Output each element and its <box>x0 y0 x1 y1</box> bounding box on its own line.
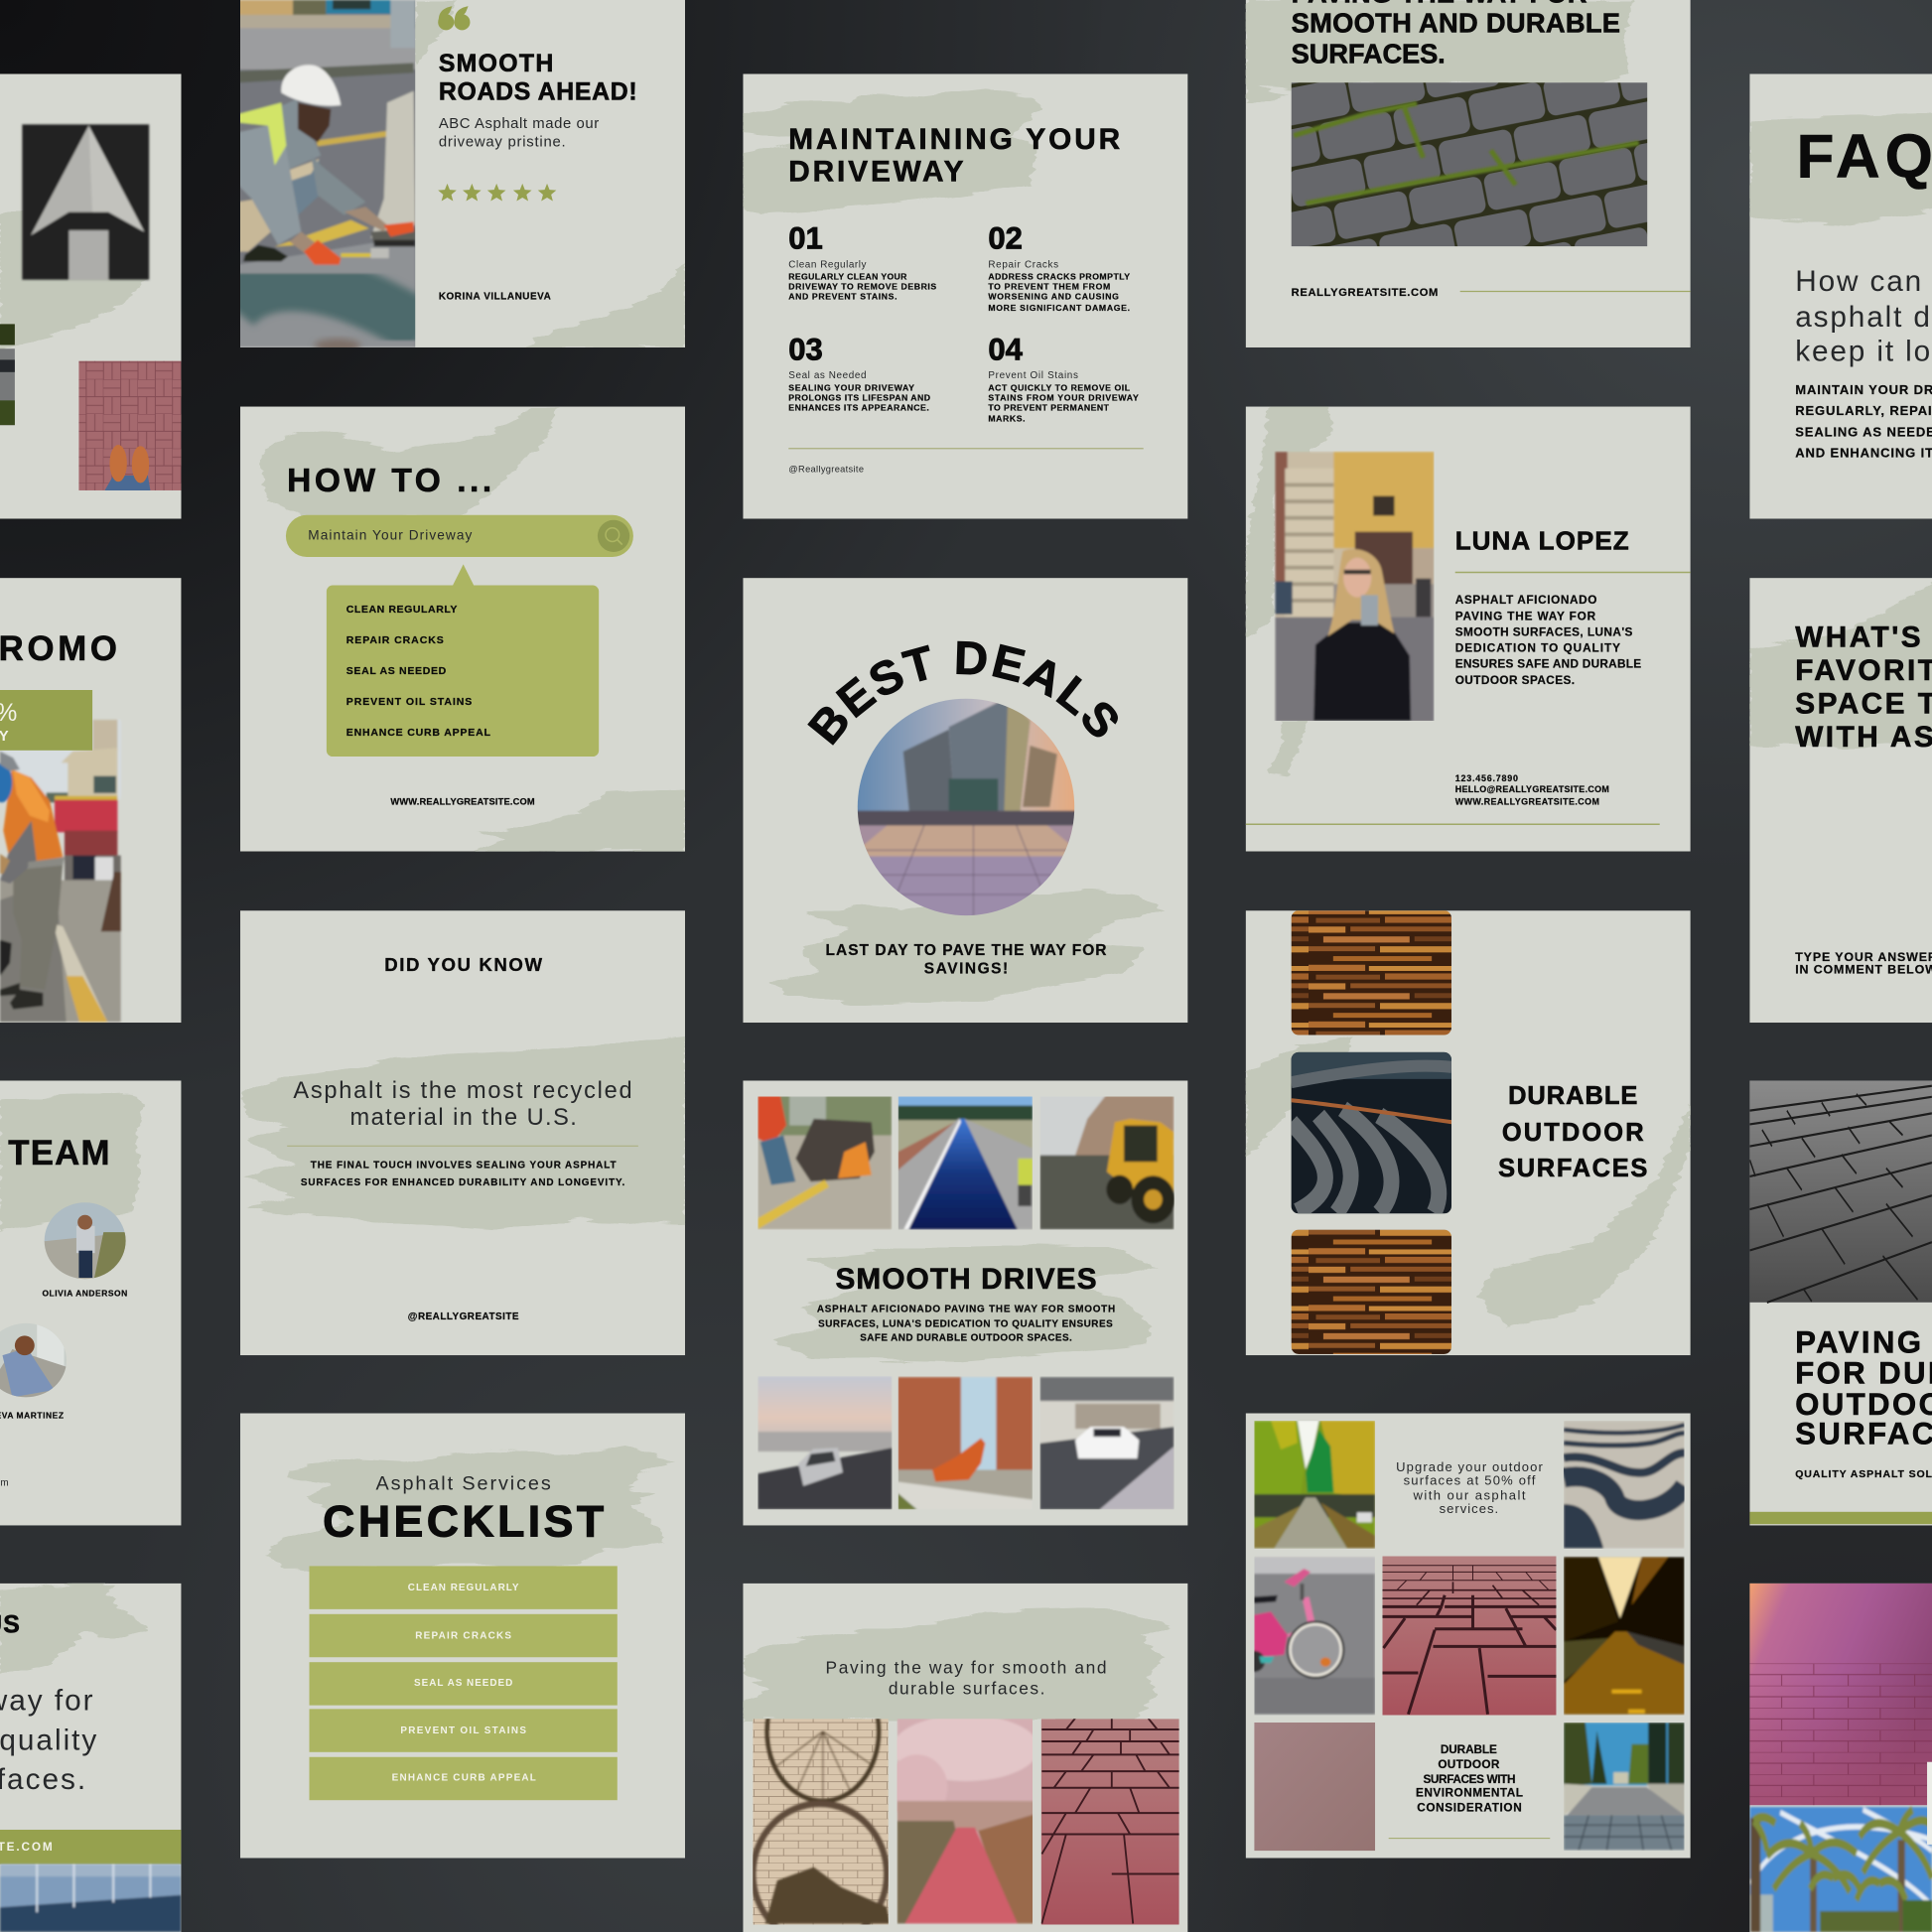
biography: PAVING THE WAY FOR <box>1455 610 1596 622</box>
tagline <box>826 1657 1106 1698</box>
promo line: LAST DAY TO PAVE THE WAY FOR <box>826 942 1106 959</box>
team photo: Eva <box>0 1320 69 1400</box>
step 04: ACT QUICKLY TO REMOVE OIL <box>988 382 1131 392</box>
step 01: REGULARLY CLEAN YOUR <box>788 272 907 282</box>
dropdown list: REPAIR CRACKS <box>346 634 444 646</box>
step 04: Prevent Oil Stains <box>988 370 1078 381</box>
step 02: MORE SIGNIFICANT DAMAGE. <box>988 303 1130 313</box>
website: REALLYGREATSITE.COM <box>1292 287 1438 299</box>
text: durable environmental: ENVIRONMENTAL <box>1416 1786 1523 1799</box>
search bar <box>286 515 633 557</box>
text: upgrade offer: surfaces at 50% off <box>1404 1472 1536 1487</box>
panel: paving grey tile card <box>1749 1080 1932 1525</box>
photo: circular building <box>858 699 1074 915</box>
fact text: Asphalt is the most recycled <box>293 1077 632 1103</box>
heading: maintaining your driveway: MAINTAINING YOUR <box>788 123 1120 156</box>
photo: Luna portrait <box>1274 451 1435 721</box>
step 02: Repair Cracks <box>988 259 1058 270</box>
step 01: AND PREVENT STAINS. <box>788 292 897 302</box>
photo: stacked wood top <box>1292 910 1451 1035</box>
contact details <box>1455 773 1609 806</box>
heading: smooth drives: SMOOTH DRIVES <box>835 1263 1097 1296</box>
step 02: TO PREVENT THEM FROM <box>988 282 1110 292</box>
step 04: 04 <box>988 332 1024 366</box>
search bar: Maintain Your Driveway <box>308 528 473 543</box>
handle: @REALLYGREATSITE <box>408 1311 519 1322</box>
photo: grey pavers <box>1749 1080 1932 1303</box>
panel: smooth drives card <box>743 1080 1187 1525</box>
dropdown list: SEAL AS NEEDED <box>346 665 447 677</box>
photo: cherry blossom path <box>897 1719 1033 1924</box>
photo: highway interchange <box>1291 1051 1452 1213</box>
panel: durable outdoor surfaces card <box>1245 910 1691 1356</box>
step 03: Seal as Needed <box>788 370 866 381</box>
photo: tree-lined avenue <box>1254 1421 1375 1549</box>
step 03: ENHANCES ITS APPEARANCE. <box>788 402 929 412</box>
photo: red brick paving <box>1040 1719 1179 1924</box>
panel: favorite space card <box>1749 578 1932 1023</box>
heading: smooth roads ahead: ROADS AHEAD! <box>439 79 637 106</box>
photo: road worker <box>240 0 415 347</box>
step 03: PROLONGS ITS LIFESPAN AND <box>788 392 930 402</box>
attribution: Korina Villanueva: KORINA VILLANUEVA <box>439 292 551 303</box>
footer band <box>1749 1512 1932 1524</box>
checklist items: CLEAN REGULARLY <box>408 1583 519 1593</box>
text: durable environmental: SURFACES WITH <box>1423 1773 1516 1786</box>
photo: red brick perspective <box>1382 1557 1557 1716</box>
checklist items: SEAL AS NEEDED <box>414 1678 512 1689</box>
smooth drives copy: SURFACES, LUNA'S DEDICATION TO QUALITY ENSURES <box>818 1319 1113 1330</box>
photo: excavator street <box>1040 1096 1174 1230</box>
contact details: 123.456.7890 <box>1455 773 1518 783</box>
step 02: 02 <box>988 221 1023 256</box>
fact detail: THE FINAL TOUCH INVOLVES SEALING YOUR ASPHALT <box>311 1161 617 1172</box>
text: upgrade offer <box>1396 1459 1543 1516</box>
testimonial quote: driveway pristine. <box>439 135 566 151</box>
photo: brick towers with excavator <box>897 1376 1033 1509</box>
checklist items <box>310 1566 618 1800</box>
team photo: Olivia <box>44 1202 126 1279</box>
heading: durable outdoor surfaces: DURABLE <box>1508 1082 1637 1110</box>
step 03 <box>788 332 930 412</box>
text: upgrade offer: Upgrade your outdoor <box>1396 1459 1543 1474</box>
promo line <box>826 942 1106 977</box>
step 04 <box>988 332 1139 423</box>
panel: pink pavers and palms card <box>1749 1584 1932 1932</box>
heading: durable outdoor surfaces: OUTDOOR <box>1502 1119 1644 1147</box>
panel: did you know card <box>240 910 685 1356</box>
step 02 <box>988 221 1130 313</box>
photo: blue asphalt road <box>897 1096 1033 1230</box>
photo: bicycle wheel shadow <box>753 1719 889 1924</box>
panel: paving the way cobble card <box>1245 0 1691 347</box>
panel: photo grid card <box>1245 1414 1691 1859</box>
biography: ASPHALT AFICIONADO <box>1455 594 1596 607</box>
smooth drives copy <box>817 1305 1115 1343</box>
heading: maintaining your driveway <box>788 123 1120 188</box>
heading: Luna Lopez: LUNA LOPEZ <box>1455 526 1629 556</box>
heading: smooth roads ahead: SMOOTH <box>439 51 553 77</box>
photo: pink bicycle <box>1254 1557 1375 1716</box>
smooth drives copy: ASPHALT AFICIONADO PAVING THE WAY FOR SMOOTH <box>817 1305 1115 1315</box>
contact details: WWW.REALLYGREATSITE.COM <box>1455 796 1599 806</box>
panel: team card <box>0 1080 181 1525</box>
photo: herringbone bricks with shoes <box>78 361 181 490</box>
handle: @Reallygreatsite <box>788 464 864 474</box>
photo: road repair torch <box>758 1096 892 1229</box>
panel: testimonial card <box>240 0 685 347</box>
heading: did you know: DID YOU KNOW <box>384 954 542 975</box>
heading: asphalt services: Asphalt Services <box>376 1472 551 1494</box>
step 02: WORSENING AND CAUSING <box>988 292 1119 302</box>
heading: smooth roads ahead <box>439 51 637 106</box>
FAQ question <box>1795 265 1932 368</box>
panel: maintaining your driveway card <box>743 73 1187 518</box>
photo: park steps <box>1563 1723 1684 1851</box>
step 02: ADDRESS CRACKS PROMPTLY <box>988 272 1130 282</box>
photo: golden sunset road <box>1563 1557 1685 1716</box>
photo: white sports car <box>1040 1376 1174 1509</box>
panel: arrow photo card <box>0 73 181 518</box>
text: durable environmental <box>1416 1743 1523 1814</box>
text: upgrade offer: with our asphalt <box>1413 1487 1526 1502</box>
step 04: TO PREVENT PERMANENT <box>988 402 1110 412</box>
question heading <box>1795 621 1932 754</box>
biography: OUTDOOR SPACES. <box>1455 674 1575 687</box>
photo: cropped road scene <box>0 324 15 425</box>
website bar <box>0 1830 181 1864</box>
photo: wavy mosaic pavement <box>1563 1421 1685 1549</box>
icon: five stars <box>438 184 556 202</box>
heading: checklist: CHECKLIST <box>323 1498 604 1547</box>
dropdown list: PREVENT OIL STAINS <box>346 696 472 708</box>
heading: paving the way: SURFACES. <box>1292 38 1446 69</box>
panel: checklist card <box>240 1414 685 1859</box>
panel: Luna Lopez card <box>1245 407 1691 852</box>
text: durable environmental: DURABLE <box>1441 1743 1497 1756</box>
photo: mossy cobblestones <box>1291 82 1648 246</box>
panel: best deals card <box>743 578 1187 1023</box>
dropdown list <box>327 564 599 757</box>
step 03: SEALING YOUR DRIVEWAY <box>788 382 914 392</box>
icon: quote marks <box>438 6 470 30</box>
photo: road arrow <box>22 124 149 280</box>
photo: silver car on coastal road <box>758 1376 892 1509</box>
caption: Olivia Anderson: OLIVIA ANDERSON <box>42 1289 128 1299</box>
heading: paving the way <box>1292 0 1620 69</box>
promo line: SAVINGS! <box>924 960 1008 977</box>
step 01: 01 <box>788 221 823 256</box>
heading: best deals curved: BEST DEALS <box>807 641 1118 746</box>
photo: mauve texture <box>1254 1723 1375 1851</box>
text: durable environmental: OUTDOOR <box>1438 1758 1500 1771</box>
panel: promo card <box>0 578 181 1023</box>
step 01: DRIVEWAY TO REMOVE DEBRIS <box>788 282 936 292</box>
panel: about us card <box>0 1583 181 1932</box>
checklist items: PREVENT OIL STAINS <box>400 1725 526 1736</box>
text: durable environmental: CONSIDERATION <box>1417 1801 1522 1814</box>
website: WWW.REALLYGREATSITE.COM <box>390 796 535 806</box>
heading: paving for durable <box>1795 1325 1932 1451</box>
checklist items: ENHANCE CURB APPEAL <box>392 1772 536 1783</box>
photo: road worker with orange vest <box>0 720 121 1022</box>
heading: maintaining your driveway: DRIVEWAY <box>788 155 964 188</box>
step 04: STAINS FROM YOUR DRIVEWAY <box>988 392 1139 402</box>
biography: ENSURES SAFE AND DURABLE <box>1455 658 1641 671</box>
text block: about copy <box>0 1685 98 1796</box>
biography: SMOOTH SURFACES, LUNA'S <box>1455 625 1633 638</box>
dropdown list: CLEAN REGULARLY <box>346 604 457 616</box>
panel: how to card <box>240 407 685 852</box>
step 04: MARKS. <box>988 413 1026 423</box>
heading: durable outdoor surfaces: SURFACES <box>1498 1155 1647 1182</box>
heading: how to: HOW TO ... <box>287 463 491 499</box>
step 01: Clean Regularly <box>788 259 867 270</box>
tagline: durable surfaces. <box>889 1678 1044 1698</box>
photo: palm trees <box>1750 1807 1932 1932</box>
heading: paving the way: SMOOTH AND DURABLE <box>1292 7 1620 38</box>
step 01 <box>788 221 936 302</box>
dropdown list: ENHANCE CURB APPEAL <box>346 727 491 739</box>
tagline: Paving the way for smooth and <box>826 1657 1106 1677</box>
fact text <box>293 1077 632 1130</box>
photo: pink bricks <box>1749 1584 1932 1805</box>
panel: FAQ card <box>1749 73 1932 518</box>
photo: stacked wood bottom <box>1292 1230 1451 1354</box>
biography <box>1455 594 1641 687</box>
heading: durable outdoor surfaces <box>1498 1082 1647 1182</box>
fact text: material in the U.S. <box>349 1104 577 1130</box>
panel: paving the way photo trio card <box>743 1583 1187 1932</box>
testimonial quote <box>439 116 599 151</box>
call to action <box>1795 950 1932 976</box>
checklist items: REPAIR CRACKS <box>415 1631 511 1642</box>
promo discount banner <box>0 690 92 751</box>
photo: glass walkway <box>0 1864 181 1932</box>
FAQ question: How can <box>1795 265 1923 298</box>
fact detail <box>301 1161 624 1188</box>
contact details: HELLO@REALLYGREATSITE.COM <box>1455 784 1609 794</box>
step 03: 03 <box>788 332 823 366</box>
biography: DEDICATION TO QUALITY <box>1455 642 1620 655</box>
text: upgrade offer: services. <box>1440 1501 1498 1516</box>
FAQ answer <box>1795 382 1932 460</box>
smooth drives copy: SAFE AND DURABLE OUTDOOR SPACES. <box>860 1332 1072 1343</box>
testimonial quote: ABC Asphalt made our <box>439 116 599 132</box>
fact detail: SURFACES FOR ENHANCED DURABILITY AND LONGEVITY. <box>301 1177 624 1188</box>
